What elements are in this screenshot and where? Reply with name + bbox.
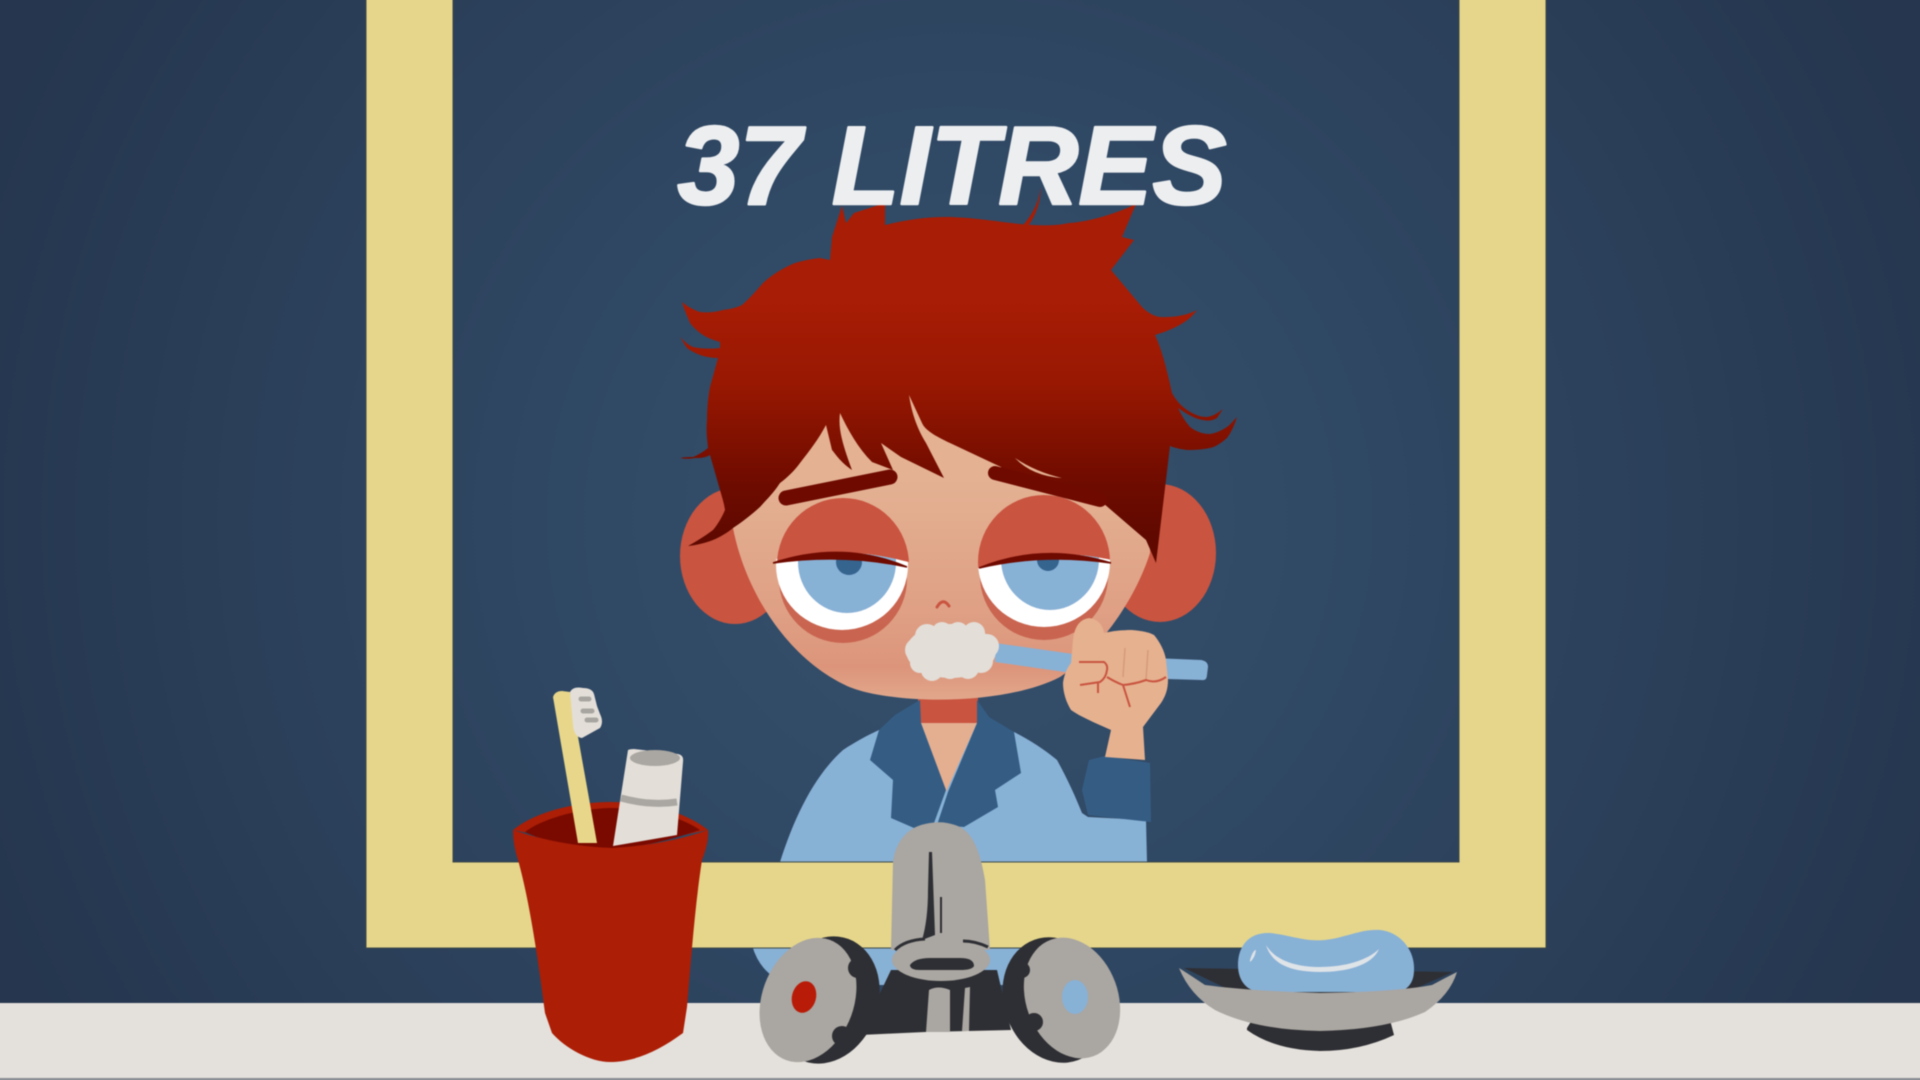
toothpaste tube [613, 749, 683, 846]
eyebrow right [995, 473, 1100, 500]
nose [937, 602, 949, 607]
stray hair strand [1024, 187, 1041, 226]
eyebrow left [786, 477, 890, 498]
soap dish with soap [1179, 930, 1457, 1051]
hair [680, 203, 1237, 563]
cold tap [985, 922, 1136, 1078]
character: boy [680, 187, 1237, 862]
finger lines [1079, 662, 1166, 707]
counter bottom edge [0, 1078, 1920, 1080]
shirt [780, 723, 1147, 862]
ears [680, 484, 1216, 624]
cup rim back [513, 802, 708, 850]
faucet base [860, 970, 1011, 1035]
cup inside [525, 808, 700, 848]
faucet [743, 822, 1136, 1079]
soap bar [1238, 930, 1414, 992]
collar [870, 700, 1021, 828]
soap highlight [1266, 945, 1379, 972]
toothbrush in mouth [995, 643, 1208, 680]
counter top [0, 1003, 1920, 1078]
base highlights [926, 987, 970, 1032]
knuckle lines [1123, 648, 1148, 680]
dish bowl [1179, 968, 1457, 1031]
soap sparkle [1250, 950, 1256, 962]
cup body [513, 830, 708, 1062]
chest skin [921, 723, 977, 792]
neck [918, 690, 978, 724]
mirror frame [366, 0, 1546, 948]
face [733, 380, 1150, 700]
spout lines [922, 852, 942, 940]
sleeve cuff [1082, 756, 1151, 822]
left eye [773, 498, 909, 643]
toothpaste foam [905, 622, 999, 681]
faucet collar [892, 939, 990, 981]
right eye [978, 495, 1111, 640]
hot tap [743, 921, 897, 1079]
toothbrush in cup [553, 688, 602, 843]
fringe highlight [1015, 458, 1062, 478]
dish foot [1247, 1020, 1394, 1051]
hand holding brush [1063, 618, 1168, 760]
title: 37 LITRES [678, 104, 1226, 228]
spout [891, 822, 990, 950]
red cup with toothbrush and toothpaste [513, 688, 708, 1062]
shirt hem visible below mirror [752, 945, 1020, 985]
dish interior [1184, 968, 1453, 995]
